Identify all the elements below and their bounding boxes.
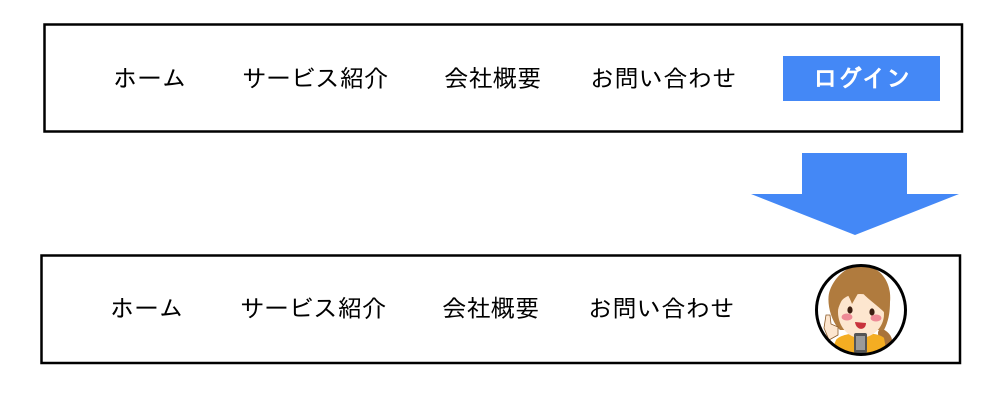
hair back — [828, 265, 890, 330]
eyes — [847, 306, 853, 314]
braid — [878, 330, 892, 346]
login button: ログイン — [813, 66, 911, 90]
jacket — [834, 334, 886, 353]
phone — [854, 333, 867, 353]
menu item: contact: お問い合わせ — [590, 66, 736, 90]
arrow: down — [751, 153, 959, 235]
menu item: services: サービス紹介 — [240, 296, 386, 320]
menu item: services: サービス紹介 — [242, 66, 388, 90]
menu item: home: ホーム — [113, 66, 186, 90]
menu item: company: 会社概要 — [442, 296, 540, 320]
icon: user avatar — [816, 265, 906, 360]
mouth — [855, 322, 866, 329]
menu item: company: 会社概要 — [444, 66, 542, 90]
menu item: contact: お問い合わせ — [588, 296, 734, 320]
login button — [783, 56, 940, 101]
pointing hand — [824, 315, 838, 340]
bangs — [838, 294, 884, 312]
cheeks — [842, 314, 852, 320]
panel: navigation before login — [44, 24, 962, 132]
menu item: home: ホーム — [110, 296, 183, 320]
panel: navigation after login — [42, 256, 960, 363]
face — [838, 294, 884, 338]
